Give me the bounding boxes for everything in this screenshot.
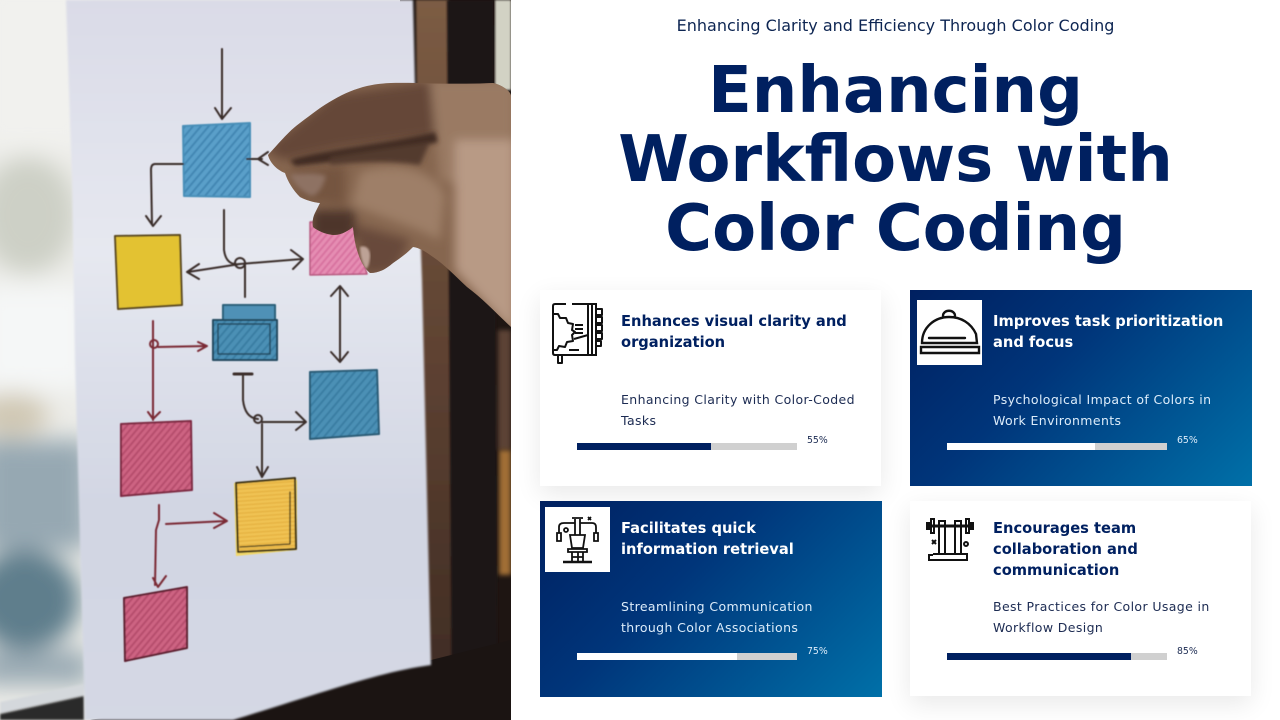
value: 75% bbox=[807, 646, 828, 657]
panel: information retrieval card bbox=[540, 501, 882, 697]
panel: team collaboration card bbox=[910, 501, 1251, 696]
title: Enhancing bbox=[708, 54, 1083, 128]
value: 85% bbox=[1177, 646, 1198, 657]
description: Streamlining Communication bbox=[621, 599, 813, 614]
flowchart drawing bbox=[115, 49, 379, 661]
heading: and focus bbox=[993, 334, 1073, 351]
icon: gym machine bbox=[545, 507, 610, 572]
box: red left bbox=[121, 421, 192, 496]
photo: hand holding color-coded flowchart bbox=[0, 0, 511, 720]
description bbox=[993, 599, 1210, 635]
subtitle: Enhancing Clarity and Efficiency Through Color Coding bbox=[677, 16, 1114, 35]
box: yellow bbox=[115, 235, 182, 309]
title: Color Coding bbox=[665, 192, 1126, 266]
description bbox=[621, 599, 813, 635]
value: 55% bbox=[807, 435, 828, 446]
heading: information retrieval bbox=[621, 541, 794, 558]
heading: Encourages team bbox=[993, 520, 1136, 537]
progress bar 65% bbox=[947, 443, 1167, 450]
arrows dark bbox=[146, 49, 348, 477]
window frame bbox=[90, 0, 511, 720]
progress bar 75% bbox=[577, 653, 797, 660]
box: blue folder bbox=[213, 305, 277, 360]
box: yellow lower bbox=[234, 478, 297, 556]
box: pink bbox=[310, 222, 367, 275]
heading: Improves task prioritization bbox=[993, 313, 1223, 330]
description: Work Environments bbox=[993, 413, 1121, 428]
icon: serving cloche bbox=[917, 300, 982, 365]
progress bar 55% bbox=[577, 443, 797, 450]
box: blue top bbox=[183, 123, 250, 197]
heading bbox=[621, 520, 794, 558]
icon: barbell rack bbox=[926, 518, 974, 561]
progress bar 85% bbox=[947, 653, 1167, 660]
heading: Enhances visual clarity and bbox=[621, 313, 847, 330]
description bbox=[993, 392, 1211, 428]
title bbox=[618, 54, 1173, 266]
description: Best Practices for Color Usage in bbox=[993, 599, 1210, 614]
description: Enhancing Clarity with Color-Coded bbox=[621, 392, 855, 407]
heading: communication bbox=[993, 562, 1119, 579]
description: through Color Associations bbox=[621, 620, 798, 635]
panel: task prioritization card bbox=[910, 290, 1252, 486]
icon: gear notebook bbox=[552, 303, 603, 364]
background blur bbox=[0, 0, 511, 720]
description bbox=[620, 392, 855, 428]
description: Psychological Impact of Colors in bbox=[993, 392, 1211, 407]
heading: organization bbox=[621, 334, 725, 351]
paper sheet bbox=[66, 0, 431, 720]
hand bbox=[268, 82, 511, 327]
box: blue right bbox=[310, 370, 379, 439]
heading bbox=[621, 313, 847, 351]
panel: visual clarity card bbox=[540, 290, 881, 486]
heading: Facilitates quick bbox=[621, 520, 756, 537]
heading bbox=[993, 520, 1138, 579]
heading: collaboration and bbox=[993, 541, 1138, 558]
arrows red bbox=[148, 321, 227, 587]
box: red lower bbox=[124, 587, 187, 661]
heading bbox=[993, 313, 1223, 351]
description: Workflow Design bbox=[993, 620, 1103, 635]
description: Tasks bbox=[621, 413, 656, 428]
value: 65% bbox=[1177, 435, 1198, 446]
title: Workflows with bbox=[618, 123, 1173, 197]
